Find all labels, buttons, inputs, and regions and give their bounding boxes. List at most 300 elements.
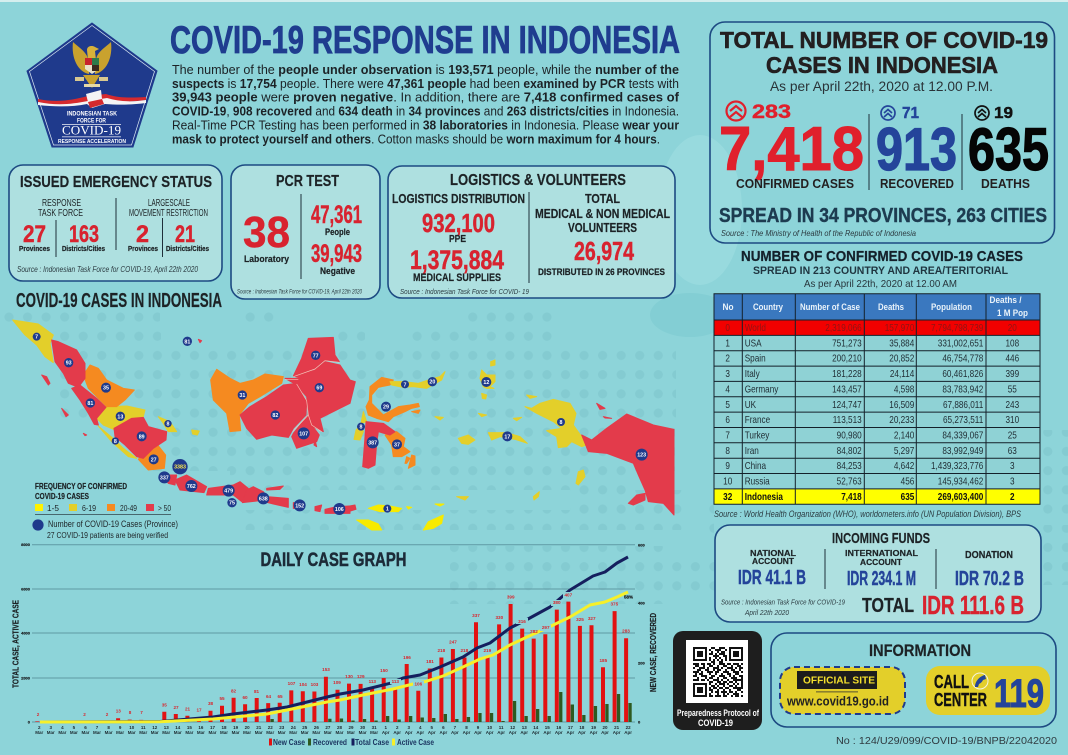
- chart: daily case graph: 2: [37, 712, 40, 717]
- recovered bars: [270, 692, 632, 722]
- chart: daily case graph: Apr: [509, 730, 517, 735]
- panel: issued emergency status: TASK FORCE: [38, 208, 83, 219]
- chart: daily case graph: Apr: [474, 730, 482, 735]
- panel: issued emergency status: Source : Indonesian Task Force for COVID-19, April 22th 2020: [17, 265, 198, 274]
- heading: COVID-19 cases in Indonesia: COVID-19 CASES IN INDONESIA: [16, 290, 222, 312]
- table: confirmed cases by country: 20,233: [889, 414, 914, 425]
- panel: incoming funds: ACCOUNT: [860, 557, 903, 567]
- table: confirmed cases by country: 67,886,011: [943, 399, 983, 410]
- chart: daily case graph: 0: [638, 720, 641, 724]
- table: confirmed cases by country: UK: [745, 399, 756, 410]
- chart: daily case graph: 297: [542, 625, 550, 630]
- table: confirmed cases by country: 83,992,949: [942, 445, 983, 456]
- chart: daily case graph: 65: [277, 694, 283, 699]
- chart: daily case graph: 18: [579, 725, 585, 730]
- QR card: preparedness protocol: Preparedness Protocol of: [677, 708, 760, 719]
- intro paragraph: Real-Time PCR Testing has been performed in 38 laboratories in Indonesia. Please wear your: [172, 118, 679, 132]
- chart: daily case graph: 13: [522, 725, 527, 730]
- chart: daily case graph: 17: [210, 725, 215, 730]
- logo: Indonesian task force pentagon: FORCE FOR: [77, 118, 107, 124]
- chart: daily case graph: TOTAL CASE, ACTIVE CASE: [10, 600, 20, 688]
- chart: daily case graph: Apr: [382, 730, 390, 735]
- icon: confirmed increase: [726, 102, 746, 120]
- chart: daily case graph: Apr: [590, 730, 598, 735]
- chart: daily case graph: 31: [372, 725, 377, 730]
- chart: daily case graph: 15: [187, 725, 192, 730]
- chart: daily case graph: 7: [454, 725, 457, 730]
- table: confirmed cases by country: 200,210: [832, 353, 862, 364]
- panel: total number of cases: 635: [968, 116, 1049, 183]
- panel: incoming funds: ACCOUNT: [752, 556, 795, 566]
- document number: No : 124/U29/099/COVID-19/BNPB/22042020: [836, 735, 1057, 747]
- table: confirmed cases by country: 751,273: [832, 338, 862, 349]
- official site badge: OFFICIAL SITE: [803, 676, 875, 686]
- table: confirmed cases by country: Germany: [745, 384, 779, 395]
- chart legend: Recovered: [313, 738, 347, 747]
- panel: total number of cases: CASES IN INDONESIA: [766, 52, 998, 78]
- chart: daily case graph: 16: [556, 725, 562, 730]
- chart: daily case graph: 23: [279, 725, 285, 730]
- intro paragraph: 39,943 people were proven negative. In addition, there are 7,418 confirmed cases of: [172, 90, 680, 104]
- intro paragraph: The number of the people under observation is 193,571 people, while the number of the: [172, 62, 679, 77]
- table: confirmed cases by country: 83,783,942: [942, 384, 983, 395]
- chart: daily case graph: 20: [245, 725, 250, 730]
- panel: PCR test: PCR TEST: [276, 173, 339, 190]
- chart: daily case graph: 113: [369, 679, 376, 684]
- chart: daily case graph: 58%: [624, 594, 633, 600]
- panel: issued emergency status: 27: [23, 221, 46, 248]
- map legend: COVID-19 CASES: [35, 491, 89, 501]
- chart: daily case graph: 283: [622, 628, 630, 634]
- map: Indonesia provinces east: [346, 360, 674, 530]
- table: confirmed cases by country: 1,439,323,776: [931, 460, 983, 471]
- active case line: [40, 592, 628, 722]
- chart: daily case graph: Mar: [151, 730, 159, 735]
- chart: daily case graph: 20: [602, 725, 608, 730]
- new case bars: [35, 602, 628, 722]
- chart: daily case graph: Mar: [278, 730, 286, 735]
- chart: daily case graph: 11: [499, 725, 504, 730]
- map: Indonesia provinces west: 93: [66, 361, 72, 367]
- chart: daily case graph: 218: [437, 648, 446, 653]
- chart: daily case graph: 218: [460, 648, 469, 653]
- panel: total number of cases: Source : The Ministry of Health of the Republic of Indonesia: [721, 228, 916, 238]
- panel: issued emergency status: 21: [175, 221, 195, 248]
- table: confirmed cases by country: USA: [745, 338, 762, 349]
- chart: daily case graph: 8: [107, 725, 110, 730]
- chart: daily case graph: 106: [414, 682, 423, 686]
- chart: daily case graph: 10: [487, 725, 493, 730]
- chart: daily case graph: 380: [553, 600, 561, 605]
- map: Indonesia provinces west: 89: [139, 434, 145, 440]
- map: Indonesia provinces west: 106: [335, 507, 344, 513]
- panel: logistics and volunteers: [388, 166, 675, 298]
- chart: daily case graph: 129: [357, 674, 365, 679]
- chart: daily case graph: 14: [175, 725, 181, 730]
- chart: daily case graph: 7: [96, 725, 99, 730]
- icon: deaths increase: [975, 106, 989, 120]
- chart: daily case graph: NEW CASE, RECOVERED: [648, 613, 658, 692]
- map: Indonesia provinces west: 77: [313, 353, 319, 359]
- table: confirmed cases by country: 52,763: [837, 476, 862, 487]
- panel: PCR test: Negative: [320, 266, 355, 276]
- map: Indonesia provinces west: 638: [259, 496, 268, 502]
- chart: daily case graph: Apr: [497, 730, 505, 735]
- chart: daily case graph: 103: [311, 682, 319, 687]
- table: confirmed cases by country: Turkey: [745, 430, 770, 441]
- chart legend: New Case: [273, 738, 305, 747]
- panel: PCR test: Source : Indonesian Task Force for COVID-19, April 22th 2020: [237, 288, 362, 296]
- panel: incoming funds: INTERNATIONAL: [845, 548, 918, 558]
- table: confirmed cases by country: 24,114: [890, 368, 914, 379]
- table: confirmed cases by country: No: [722, 302, 734, 313]
- table: confirmed cases by country: 635: [901, 491, 914, 502]
- map: Indonesia provinces west: 7: [35, 335, 38, 341]
- chart: daily case graph: 316: [518, 619, 526, 624]
- chart: daily case graph: Apr: [393, 730, 401, 735]
- map legend: [32, 481, 178, 540]
- panel: incoming funds: NATIONAL: [750, 548, 796, 558]
- map legend: 27 COVID-19 patients are being verified: [47, 531, 168, 540]
- chart: daily case graph: 5: [431, 725, 434, 730]
- table: confirmed cases by country: 7: [725, 430, 730, 441]
- panel: logistics and volunteers: MEDICAL SUPPLIES: [413, 272, 501, 284]
- panel: logistics and volunteers: VOLUNTEERS: [568, 220, 637, 235]
- table: confirmed cases by country: 5: [725, 399, 730, 410]
- map: Indonesia provinces west: 479: [224, 489, 233, 495]
- table: confirmed cases by country: China: [745, 460, 767, 471]
- chart: daily case graph: Apr: [486, 730, 494, 735]
- chart: daily case graph: Mar: [324, 730, 332, 735]
- intro paragraph: suspects is 17,754 people. There were 47,361 people had been examined by PCR tests with: [172, 76, 679, 91]
- heading: number of confirmed cases worldwide: SPREAD IN 213 COUNTRY AND AREA/TERITORIAL: [753, 265, 1008, 277]
- panel: total number of cases: 913: [876, 116, 957, 183]
- chart: daily case graph: Apr: [555, 730, 563, 735]
- chart: daily case graph: Mar: [347, 730, 355, 735]
- chart: daily case graph: 11: [141, 725, 146, 730]
- panel: total number of cases: [710, 22, 1054, 243]
- official site badge: www.covid19.go.id: [786, 694, 889, 708]
- table: confirmed cases by country: 6: [725, 414, 730, 425]
- chart: daily case graph: 400: [638, 600, 645, 606]
- table: confirmed cases by country: 3: [1010, 460, 1015, 471]
- chart: daily case graph: 55: [219, 696, 225, 701]
- chart: daily case graph: 247: [449, 640, 457, 644]
- chart: daily case graph: 17: [196, 708, 202, 712]
- table: confirmed cases by country: 90,980: [837, 430, 862, 441]
- table: confirmed cases by country: 0: [725, 322, 730, 333]
- panel: issued emergency status: 163: [69, 221, 99, 248]
- panel: incoming funds: TOTAL: [862, 595, 914, 617]
- chart: daily case graph: 21: [256, 725, 262, 730]
- panel: issued emergency status: RESPONSE: [42, 198, 81, 209]
- chart: daily case graph: Mar: [359, 730, 367, 735]
- chart: daily case graph: 2: [38, 725, 41, 730]
- chart: daily case graph: 21: [614, 725, 620, 730]
- chart: daily case graph: Mar: [139, 730, 147, 735]
- panel: incoming funds: IDR 70.2 B: [955, 568, 1024, 590]
- map legend: > 50: [158, 503, 171, 513]
- chart: daily case graph: 27: [173, 705, 179, 710]
- panel: PCR test: People: [325, 227, 350, 237]
- table: confirmed cases by country: 5,297: [894, 445, 914, 456]
- map: Indonesia provinces west: 337: [160, 475, 169, 481]
- chart: daily case graph: Mar: [266, 730, 274, 735]
- map: Indonesia provinces west: 31: [239, 393, 245, 399]
- chart: daily case graph: Apr: [543, 730, 551, 735]
- chart: daily case graph: 13: [116, 708, 121, 714]
- chart: daily case graph: 104: [299, 682, 307, 687]
- chart: daily case graph: Apr: [428, 730, 436, 735]
- chart: daily case graph: Apr: [416, 730, 424, 735]
- table: confirmed cases by country: 2,319,066: [825, 322, 862, 333]
- chart: daily case graph: Apr: [520, 730, 528, 735]
- chart: daily case graph: 25: [302, 725, 308, 730]
- map: Indonesia provinces west: 81: [184, 339, 190, 345]
- table: confirmed cases by country: 399: [1005, 368, 1019, 379]
- map: Indonesia provinces east: 8: [360, 425, 363, 431]
- panel: incoming funds: April 22th 2020: [744, 608, 790, 617]
- chart: daily case graph: 185: [599, 658, 608, 663]
- table: confirmed cases by country: 35,884: [889, 338, 914, 349]
- table: confirmed cases by country: [714, 294, 1040, 504]
- table: confirmed cases by country: Country: [753, 302, 784, 313]
- table: confirmed cases by country: 4: [725, 384, 730, 395]
- map legend: 20-49: [120, 503, 137, 513]
- chart: daily case graph: 375: [610, 602, 619, 606]
- chart: daily case graph: 82: [231, 688, 236, 694]
- official site badge: [780, 667, 905, 714]
- QR card: preparedness protocol: COVID-19: [698, 718, 733, 729]
- chart: daily case graph: 3: [407, 725, 410, 730]
- chart: daily case graph: Mar: [162, 730, 171, 735]
- chart: daily case graph: Mar: [312, 730, 321, 735]
- panel: incoming funds: IDR 234.1 M: [847, 568, 916, 590]
- heading: number of confirmed cases worldwide: NUMBER OF CONFIRMED COVID-19 CASES: [741, 249, 1023, 265]
- map: Indonesia provinces west: 27: [151, 457, 157, 463]
- chart: daily case graph: 3: [50, 725, 53, 730]
- table: confirmed cases by country: 1: [725, 338, 730, 349]
- panel: issued emergency status: Districts/Cities: [62, 244, 105, 253]
- panel: information: INFORMATION: [869, 641, 971, 660]
- chart: daily case graph: 200: [638, 660, 645, 666]
- panel: total number of cases: 7,418: [719, 115, 864, 184]
- chart: daily case graph: 2000: [21, 676, 31, 680]
- chart: daily case graph: 22: [268, 725, 273, 730]
- map: Indonesia provinces west: 82: [272, 413, 278, 419]
- panel: issued emergency status: Provinces: [128, 244, 158, 253]
- table: confirmed cases by country: 2,140: [894, 430, 914, 441]
- panel: PCR test: Laboratory: [244, 254, 290, 265]
- heading: number of confirmed cases worldwide: [741, 249, 1023, 290]
- table: confirmed cases by country: 1 M Pop: [997, 308, 1028, 319]
- panel: logistics and volunteers: TOTAL: [585, 191, 620, 206]
- table: confirmed cases by country: 269,603,400: [938, 491, 983, 502]
- panel: total number of cases: As per April 22th, 2020 at 12.00 P.M.: [770, 79, 993, 94]
- table: confirmed cases by country: 181,228: [832, 368, 862, 379]
- table: confirmed cases by country: 3: [1010, 476, 1015, 487]
- call center badge: CENTER: [934, 690, 987, 710]
- chart: daily case graph: Mar: [301, 730, 309, 735]
- chart: daily case graph: 9: [477, 725, 480, 730]
- table: confirmed cases by country: Number of Case: [800, 302, 860, 313]
- table: confirmed cases by country: 2: [1010, 491, 1015, 502]
- map: Indonesia provinces west: 69: [316, 386, 322, 392]
- call center badge: CALL: [934, 672, 969, 692]
- panel: PCR test: 39,943: [311, 240, 362, 268]
- table: confirmed cases by country: 46,754,778: [942, 353, 983, 364]
- logo: Indonesian task force pentagon: INDONESIAN TASK: [67, 112, 118, 118]
- map: Indonesia provinces west: 152: [295, 503, 304, 509]
- chart: daily case graph: 4000: [21, 630, 31, 636]
- chart: daily case graph: 18: [221, 725, 227, 730]
- panel: information: [771, 633, 1056, 727]
- chart: daily case graph: Apr: [532, 730, 540, 735]
- table: confirmed cases by country: Russia: [745, 476, 771, 487]
- chart: daily case graph: 4: [419, 725, 422, 730]
- chart: daily case graph: 35: [162, 702, 167, 708]
- chart: daily case graph: Mar: [35, 730, 44, 735]
- chart: daily case graph: 107: [288, 681, 296, 686]
- chart: daily case graph: 5: [73, 725, 76, 730]
- chart: daily case graph: 6: [442, 725, 445, 730]
- table: confirmed cases by country: 4,598: [894, 384, 914, 395]
- chart: daily case graph: Apr: [451, 730, 459, 735]
- chart: daily case graph: 282: [530, 629, 538, 634]
- table: confirmed cases by country: France: [745, 414, 770, 425]
- panel: logistics and volunteers: DISTRIBUTED IN 26 PROVINCES: [538, 267, 665, 278]
- chart: daily case graph: Mar: [70, 730, 78, 735]
- map: Indonesia provinces west: 81: [87, 401, 93, 407]
- table: confirmed cases by country: 10: [723, 476, 732, 487]
- table: confirmed cases by country: 9: [725, 460, 730, 471]
- chart: daily case graph: Apr: [624, 730, 632, 735]
- chart: daily case graph: 325: [576, 617, 584, 622]
- call center badge: [926, 666, 1050, 716]
- table: confirmed cases by country: 7,418: [841, 491, 862, 502]
- panel: incoming funds: Source : Indonesian Task Force for COVID-19: [721, 598, 846, 606]
- map: Indonesia provinces west: 107: [299, 431, 308, 437]
- chart: daily case graph: Mar: [335, 730, 344, 735]
- intro paragraph: mask to protect yourself and others. Cotton masks should be worn maximum for 4 hours.: [172, 132, 660, 146]
- table: confirmed cases by country: 157,970: [885, 322, 914, 333]
- chart: daily case graph: 19: [591, 725, 596, 730]
- map: Indonesia provinces east: 20: [429, 380, 435, 386]
- panel: incoming funds: [715, 525, 1041, 622]
- chart: daily case graph: Mar: [370, 730, 378, 735]
- table: confirmed cases by country: Italy: [745, 368, 760, 379]
- chart: daily case graph: 8000: [21, 542, 31, 547]
- chart: daily case graph: 327: [588, 616, 596, 621]
- chart: daily case graph: Mar: [243, 730, 251, 735]
- chart: daily case graph: 337: [472, 613, 480, 618]
- panel: total number of cases: 71: [902, 105, 919, 122]
- map: Indonesia provinces west: 8: [114, 439, 117, 445]
- chart: daily case graph: Mar: [232, 730, 240, 735]
- chart: daily case graph: Apr: [601, 730, 609, 735]
- chart: daily case graph: 2: [396, 725, 399, 730]
- table: confirmed cases by country: 243: [1005, 399, 1019, 410]
- table: confirmed cases by country: 4,642: [894, 460, 914, 471]
- logo: Indonesian task force pentagon: COVID-19: [62, 122, 121, 138]
- panel: issued emergency status: [9, 165, 222, 281]
- map: Indonesia provinces east: 29: [383, 405, 389, 411]
- map legend: Number of COVID-19 Cases (Province): [48, 519, 178, 530]
- chart: daily case graph: 109: [333, 680, 341, 685]
- table: confirmed cases by country: 331,002,651: [938, 338, 983, 349]
- chart: daily case graph: 30: [360, 725, 366, 730]
- map legend: 1-5: [47, 503, 59, 513]
- chart: daily case graph: 4: [61, 725, 64, 730]
- panel: logistics and volunteers: 1,375,884: [410, 245, 504, 275]
- table: confirmed cases by country: 145,934,462: [938, 476, 983, 487]
- table: confirmed cases by country: 20,852: [889, 353, 914, 364]
- table: confirmed cases by country: 8: [725, 445, 730, 456]
- chart: daily case graph: 150: [380, 668, 388, 673]
- chart: daily case graph: Mar: [220, 730, 228, 735]
- chart: daily case graph: 13: [164, 725, 169, 730]
- chart: daily case graph: Mar: [185, 730, 194, 735]
- table: confirmed cases by country: 60,461,826: [942, 368, 983, 379]
- table: confirmed cases by country: 84,802: [837, 445, 862, 456]
- panel: total number of cases: 19: [994, 105, 1013, 122]
- title: COVID-19 RESPONSE IN INDONESIA: [170, 19, 680, 62]
- chart: daily case graph: 26: [314, 725, 319, 730]
- chart: daily case graph: 9: [119, 725, 122, 730]
- table: confirmed cases by country: Deaths: [878, 302, 904, 313]
- panel: incoming funds: IDR 41.1 B: [738, 567, 806, 589]
- chart: daily case graph: 16: [198, 725, 204, 730]
- logo: Indonesian task force pentagon: RESPONSE ACCELERATION: [58, 139, 126, 145]
- chart: daily case graph: 181: [426, 659, 434, 664]
- QR card: preparedness protocol: [673, 631, 762, 730]
- panel: issued emergency status: ISSUED EMERGENCY STATUS: [20, 174, 212, 191]
- table: confirmed cases by country: 25: [1008, 430, 1017, 441]
- chart: daily case graph: 2: [106, 712, 109, 717]
- chart: daily case graph: Mar: [174, 730, 182, 735]
- chart: daily case graph: 60: [242, 695, 248, 700]
- table: confirmed cases by country: 2: [725, 353, 730, 364]
- chart: daily case graph: 330: [495, 615, 504, 620]
- table: confirmed cases by country: 65,273,511: [943, 414, 983, 425]
- chart: daily case graph: Mar: [116, 730, 124, 735]
- chart: daily case graph: [10, 542, 658, 735]
- table: confirmed cases by country: 63: [1008, 445, 1017, 456]
- chart: daily case graph: Apr: [613, 730, 621, 735]
- chart: daily case graph: 600: [638, 542, 645, 548]
- table: confirmed cases by country: 32: [723, 491, 732, 502]
- table: confirmed cases by country: 456: [901, 476, 914, 487]
- table: confirmed cases by country: 446: [1005, 353, 1019, 364]
- table: confirmed cases by country: 55: [1008, 384, 1017, 395]
- map: Indonesia provinces east: 17: [504, 434, 510, 440]
- table: confirmed cases by country: 84,253: [837, 460, 862, 471]
- chart: daily case graph: Mar: [58, 730, 67, 735]
- chart: daily case graph: 19: [233, 725, 239, 730]
- table: confirmed cases by country: 143,457: [832, 384, 862, 395]
- chart: daily case graph: 6000: [21, 586, 31, 592]
- chart legend: Active Case: [397, 738, 434, 747]
- chart: daily case graph: 14: [533, 725, 539, 730]
- panel: PCR test: [231, 165, 380, 299]
- map: Indonesia provinces west: 35: [103, 386, 109, 392]
- chart: daily case graph: 399: [507, 594, 515, 600]
- chart: daily case graph: Mar: [105, 730, 113, 735]
- chart: daily case graph: 10: [129, 725, 135, 730]
- table: confirmed cases by country: Population: [931, 302, 972, 313]
- chart: daily case graph: 196: [403, 655, 411, 660]
- map: Indonesia provinces east: 123: [637, 453, 646, 459]
